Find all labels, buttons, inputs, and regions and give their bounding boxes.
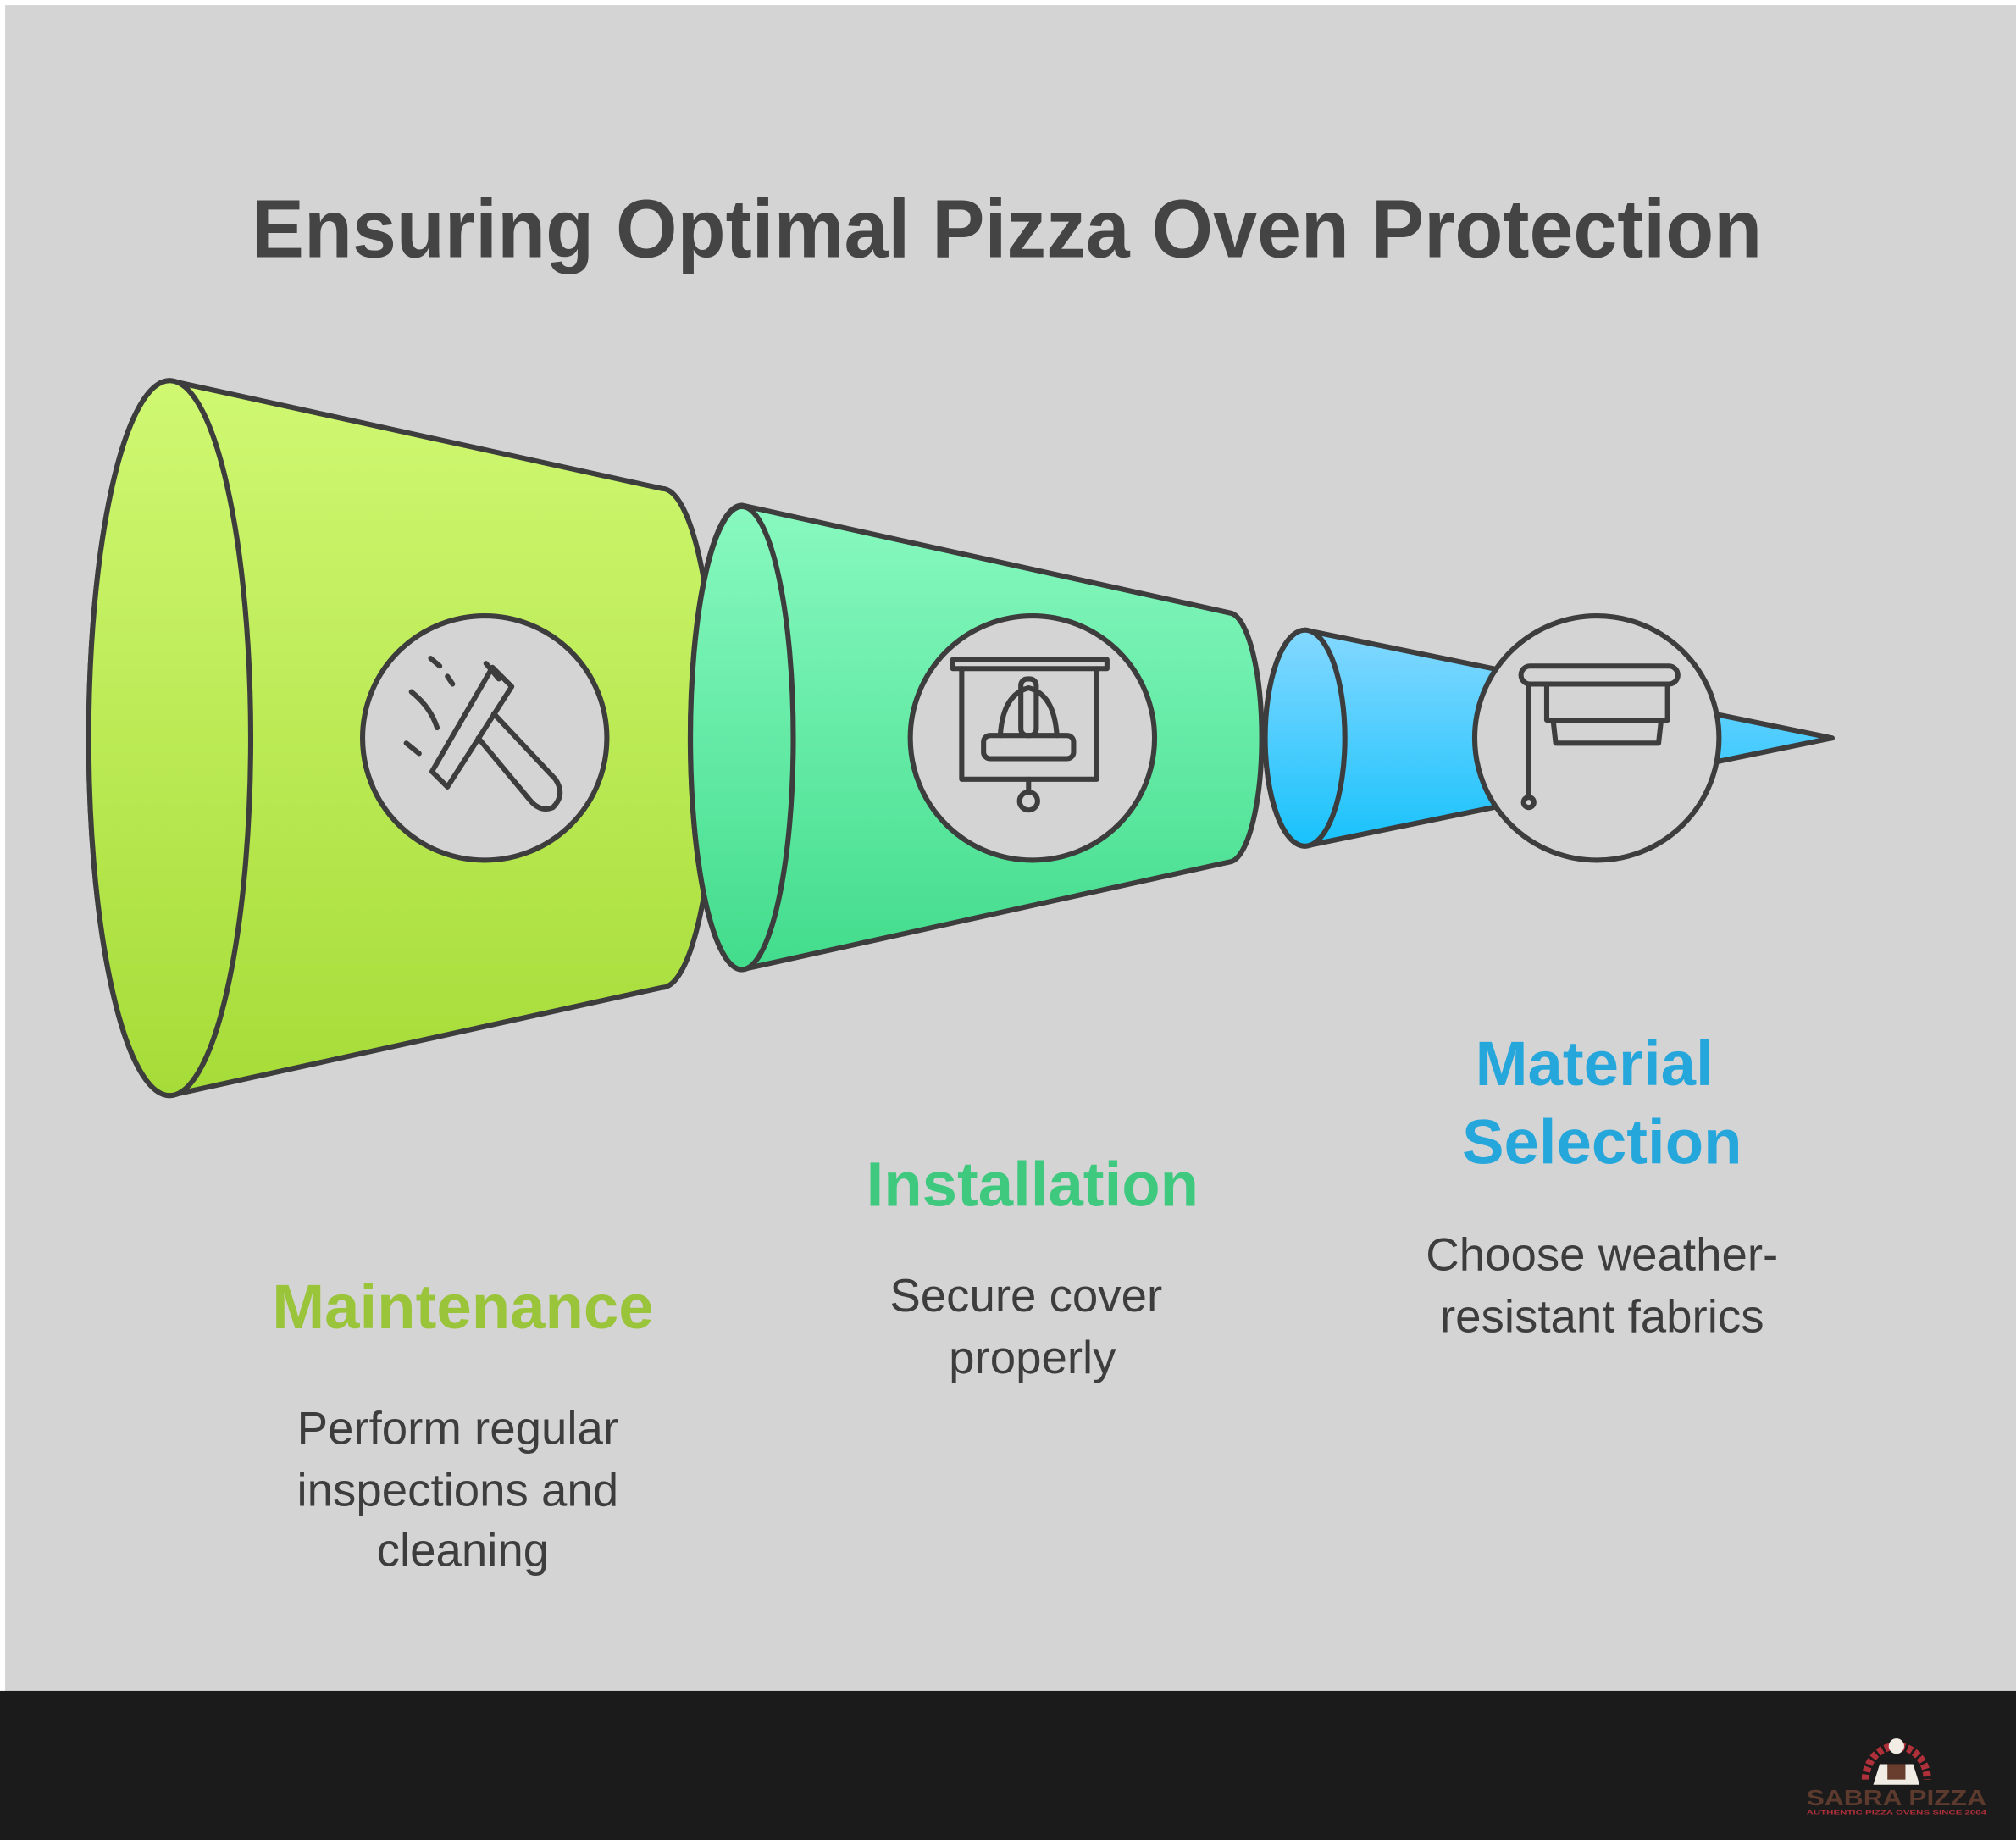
cone: material selection	[1266, 630, 1832, 846]
label: maintenance: cleaning	[377, 1525, 549, 1577]
logo: sabra pizza	[1807, 1738, 1986, 1816]
label: material selection: Material	[1476, 1028, 1714, 1099]
label: material selection: resistant fabrics	[1440, 1290, 1764, 1342]
title: Ensuring Optimal Pizza Oven Protection	[252, 183, 1762, 275]
icon: presentation board with hard hat	[911, 616, 1155, 860]
icon: window shade	[1475, 616, 1719, 860]
label: installation: Installation	[867, 1150, 1199, 1220]
label: maintenance: inspections and	[297, 1464, 618, 1516]
footer bar	[0, 1691, 2016, 1840]
cone: installation	[690, 506, 1262, 969]
label: installation	[867, 1150, 1199, 1383]
cone: maintenance	[89, 380, 716, 1095]
label: material selection: Selection	[1462, 1107, 1742, 1178]
label: maintenance: Perform regular	[297, 1403, 618, 1455]
label: maintenance	[272, 1272, 654, 1577]
label: installation: properly	[949, 1332, 1116, 1383]
icon: squeegee	[363, 616, 606, 860]
label: material selection	[1426, 1028, 1778, 1342]
label: material selection: Choose weather-	[1426, 1229, 1778, 1281]
logo: sabra pizza: SABRA PIZZA	[1807, 1787, 1986, 1810]
logo: sabra pizza: AUTHENTIC PIZZA OVENS SINCE 2004	[1807, 1810, 1986, 1816]
label: maintenance: Maintenance	[272, 1272, 654, 1342]
label: installation: Secure cover	[889, 1270, 1162, 1322]
